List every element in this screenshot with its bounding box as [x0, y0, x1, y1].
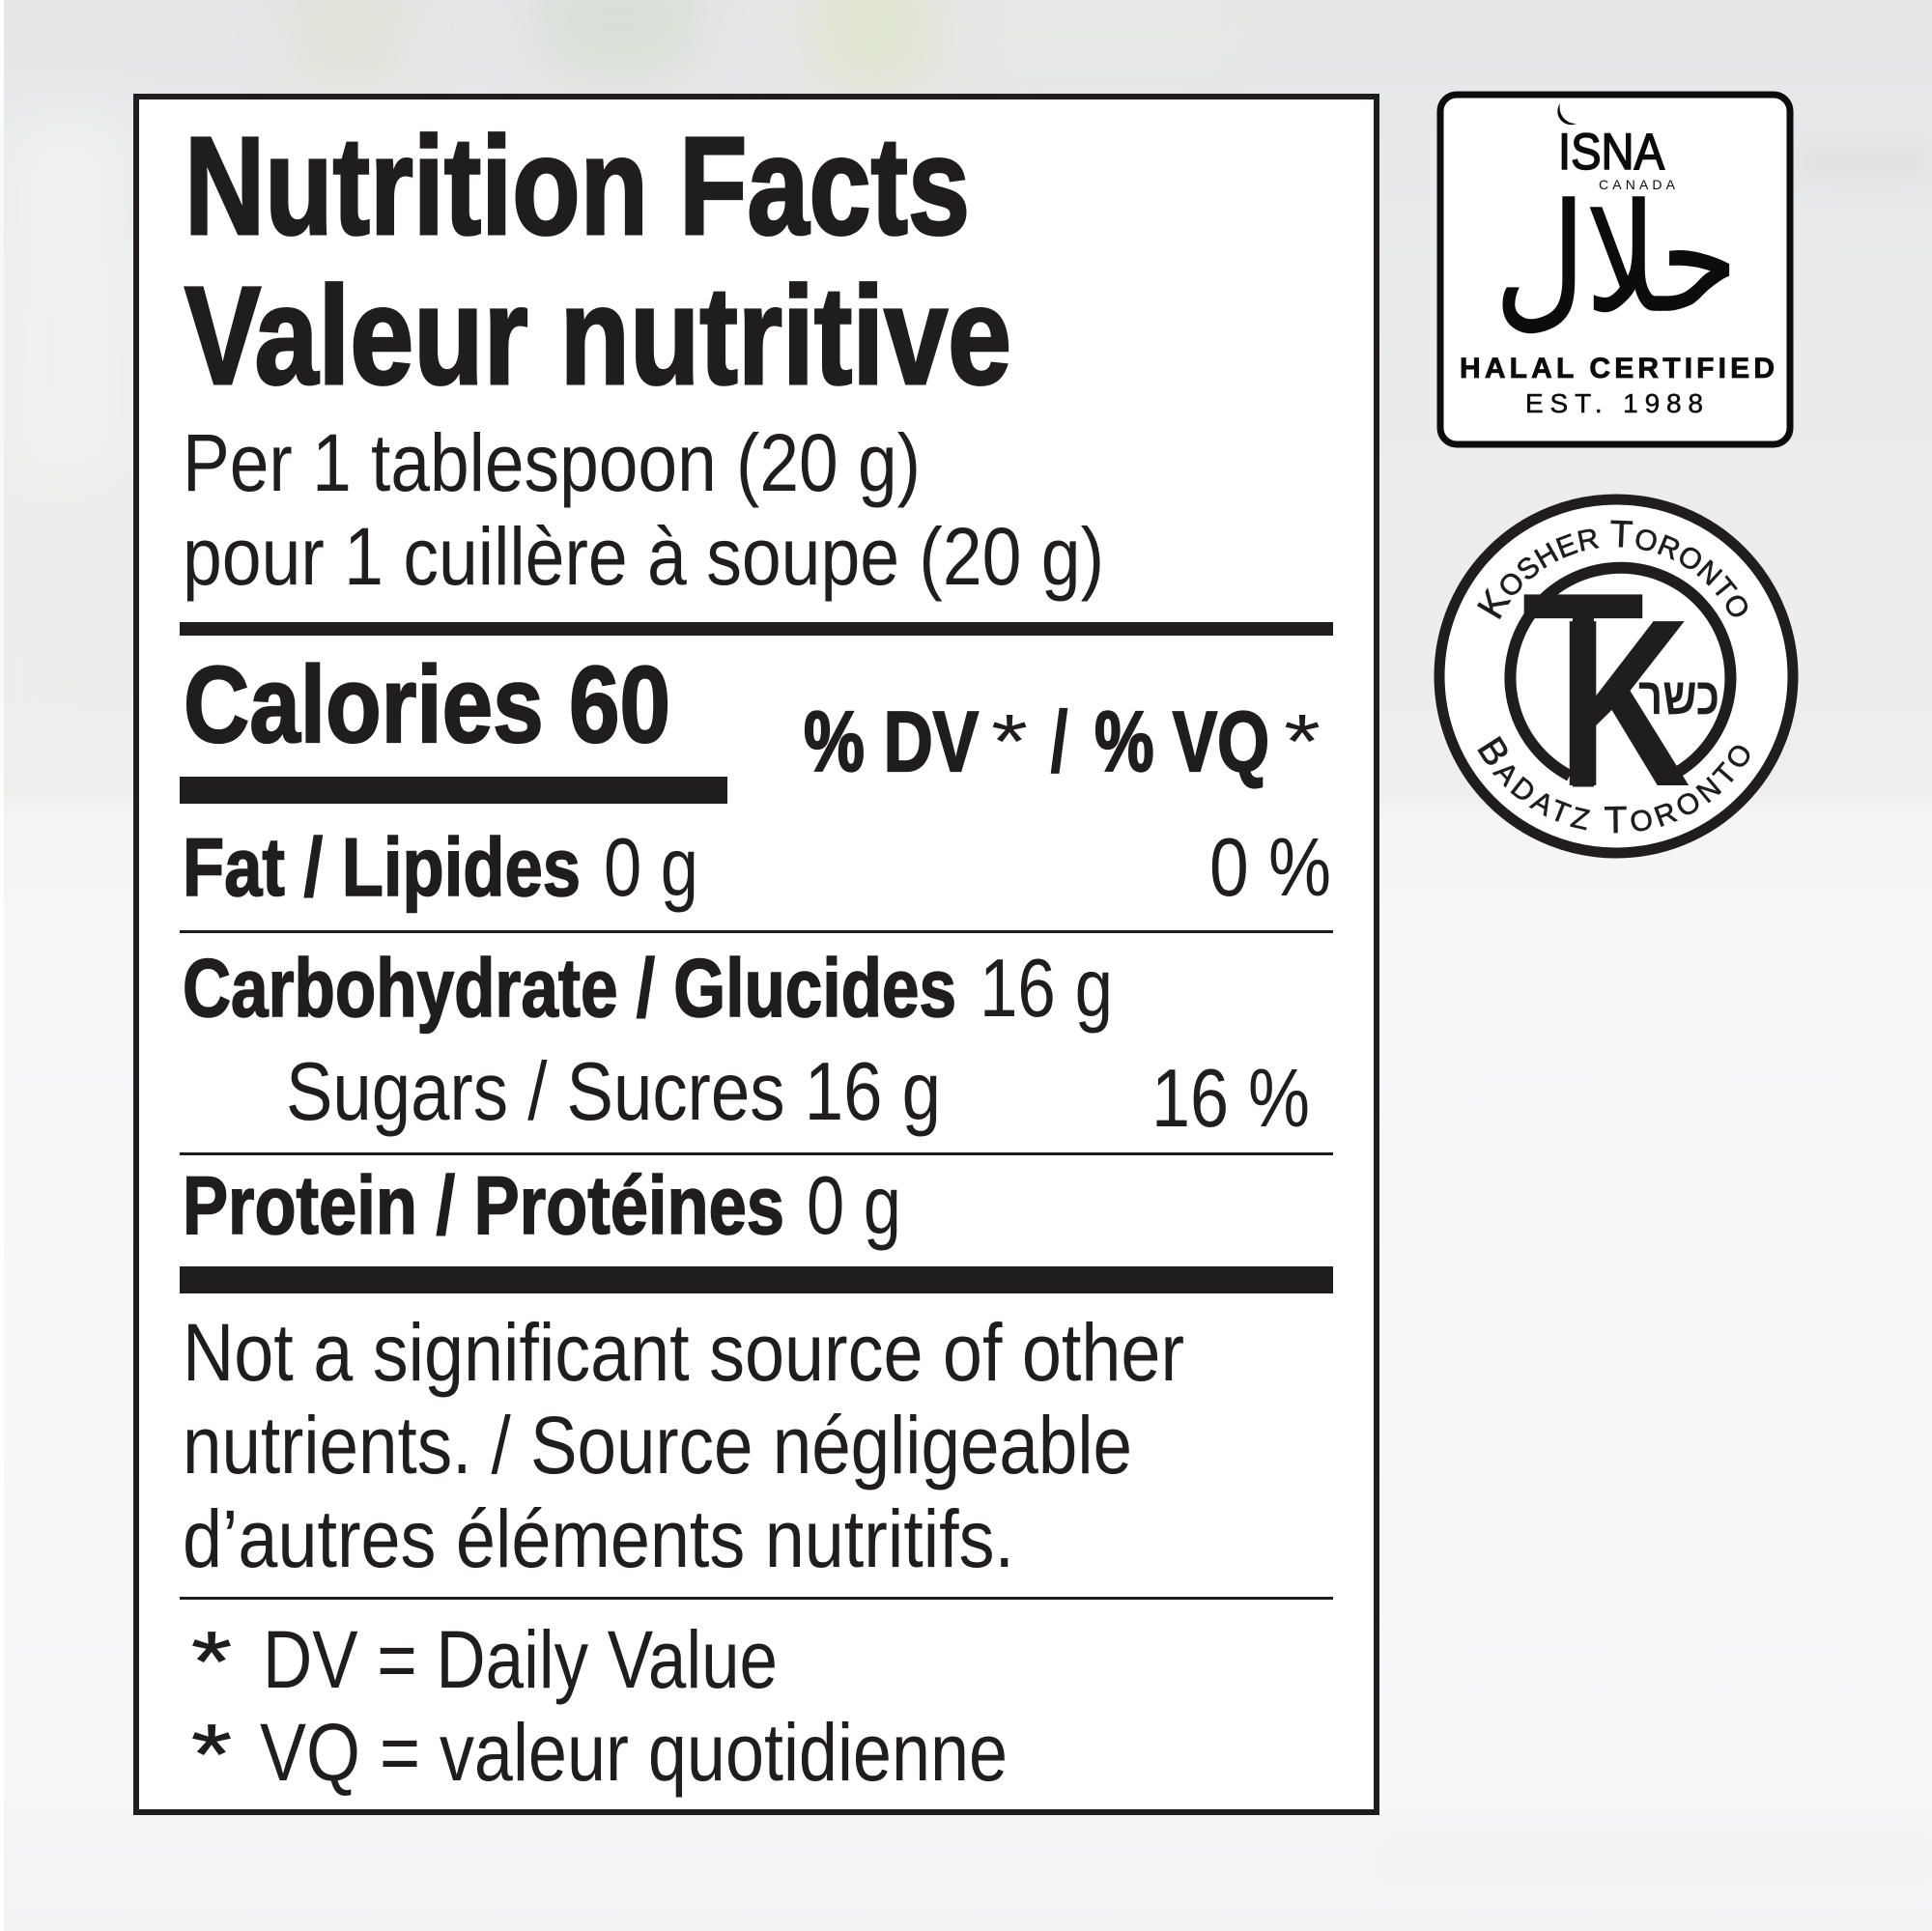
serving size: French: pour 1 cuillère à soupe (20 g) — [183, 511, 1104, 602]
heading: Valeur nutritive: Valeur nutritive — [185, 258, 1011, 413]
row: sugars: 16 % — [1151, 1053, 1310, 1145]
Arabic word halal: حلال — [1494, 173, 1738, 346]
row: fat: Fat / Lipides — [183, 822, 581, 914]
row: sugars — [286, 1046, 1310, 1145]
row: carbohydrate: Carbohydrate / Glucides — [183, 943, 956, 1035]
daily value column heading — [804, 694, 1321, 789]
established date: EST. 1988 — [1525, 388, 1703, 418]
serving size: English: Per 1 tablespoon (20 g) — [183, 417, 921, 508]
monogram T: T — [1520, 537, 1646, 844]
row: fat — [183, 822, 1331, 914]
note: other nutrients: Not a significant source of other — [183, 1307, 1184, 1398]
icon: crescent — [1557, 103, 1577, 125]
CANADA label: CANADA — [1599, 177, 1676, 192]
Hebrew word kosher: כשר — [1638, 667, 1719, 725]
panel: nutrition facts table — [136, 97, 1377, 1812]
footnote: DV: * — [191, 1613, 232, 1709]
daily value column heading: * — [991, 698, 1028, 784]
daily value column heading: % VQ — [1094, 694, 1269, 789]
row: fat: 0 g — [604, 822, 698, 914]
ISNA wordmark: ISNA — [1558, 124, 1665, 181]
footnote: VQ: VQ = valeur quotidienne — [260, 1707, 1008, 1798]
ring text: Badatz Toronto: BADATZ TORONTO — [1477, 736, 1750, 833]
monogram K: K — [1557, 570, 1690, 837]
badge: ISNA halal certified — [1440, 95, 1790, 444]
daily value column heading: * — [1284, 698, 1321, 784]
ring text: Kosher Toronto: KOSHER TORONTO — [1477, 520, 1748, 620]
note: other nutrients: d’autres éléments nutritifs. — [183, 1493, 1014, 1584]
row: fat: 0 % — [1209, 822, 1331, 914]
row: protein: Protein / Protéines — [183, 1160, 784, 1252]
calories: Calories 60 — [184, 644, 670, 765]
HALAL CERTIFIED label: HALAL CERTIFIED — [1460, 353, 1775, 384]
row: protein: 0 g — [807, 1160, 901, 1252]
badge: Kosher Toronto — [1434, 495, 1799, 858]
daily value column heading: % DV — [804, 694, 979, 789]
note: other nutrients: nutrients. / Source négligeable — [183, 1400, 1132, 1491]
row: sugars: Sugars / Sucres 16 g — [286, 1046, 941, 1138]
footnote: VQ: * — [191, 1706, 232, 1802]
daily value column heading: / — [1051, 694, 1067, 789]
heading: Nutrition Facts: Nutrition Facts — [185, 108, 970, 264]
inner ring — [1510, 568, 1730, 776]
footnote: DV: DV = Daily Value — [263, 1614, 778, 1705]
note: other nutrients — [183, 1307, 1184, 1584]
row: carbohydrate: 16 g — [980, 943, 1113, 1035]
